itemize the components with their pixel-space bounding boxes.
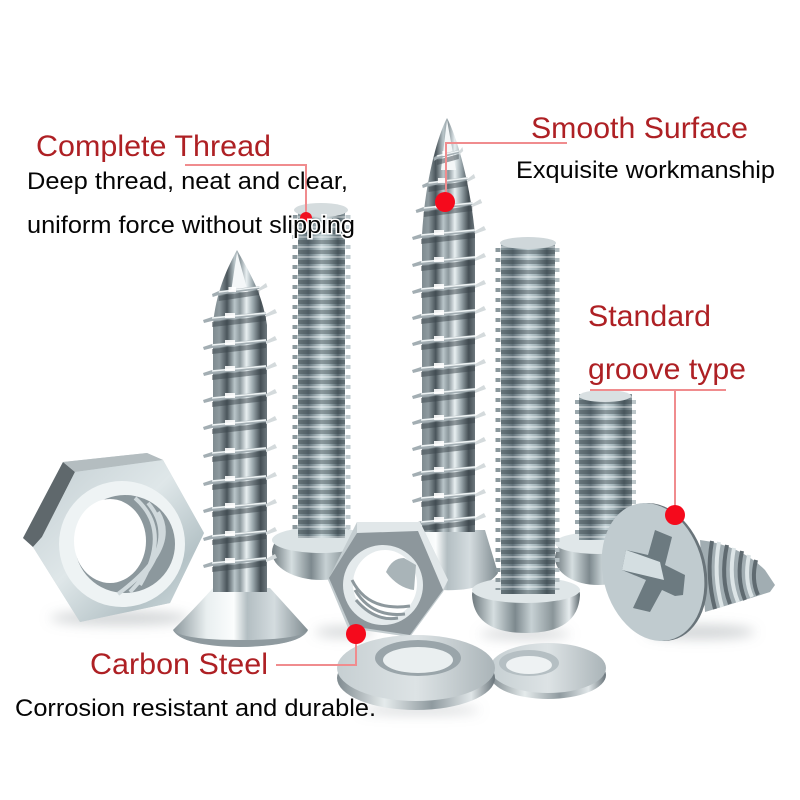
callout: Carbon Steel: [15, 624, 376, 722]
callout: Complete Thread: uniform force without slipping: [27, 212, 355, 239]
self-tapping screw: left: [173, 250, 308, 647]
callout: Carbon Steel: Carbon Steel: [90, 648, 268, 681]
callout: Standard groove type: Standard: [588, 300, 711, 333]
small hex nut: [328, 522, 448, 637]
machine screw: back left: [272, 203, 370, 580]
callout: Smooth Surface: Smooth Surface: [531, 112, 748, 145]
machine screw: tall middle right: [472, 237, 580, 633]
callout: Carbon Steel: Corrosion resistant and durable.: [15, 695, 376, 722]
phillips head screw: [588, 492, 775, 652]
flat washers: [337, 635, 606, 710]
callout: Complete Thread: [27, 130, 355, 239]
callout: Complete Thread: Deep thread, neat and clear,: [27, 168, 348, 195]
callout: Smooth Surface: [435, 112, 775, 212]
callout: Standard groove type: [588, 300, 746, 525]
callout: Standard groove type: groove type: [588, 353, 746, 386]
callout: Complete Thread: Complete Thread: [36, 130, 271, 163]
floor shadows: [50, 611, 755, 714]
self-tapping screw: tall centre: [385, 118, 498, 590]
callout: Smooth Surface: Exquisite workmanship: [516, 157, 775, 184]
machine screw: small back right: [555, 390, 641, 585]
large hex nut: [23, 453, 204, 622]
